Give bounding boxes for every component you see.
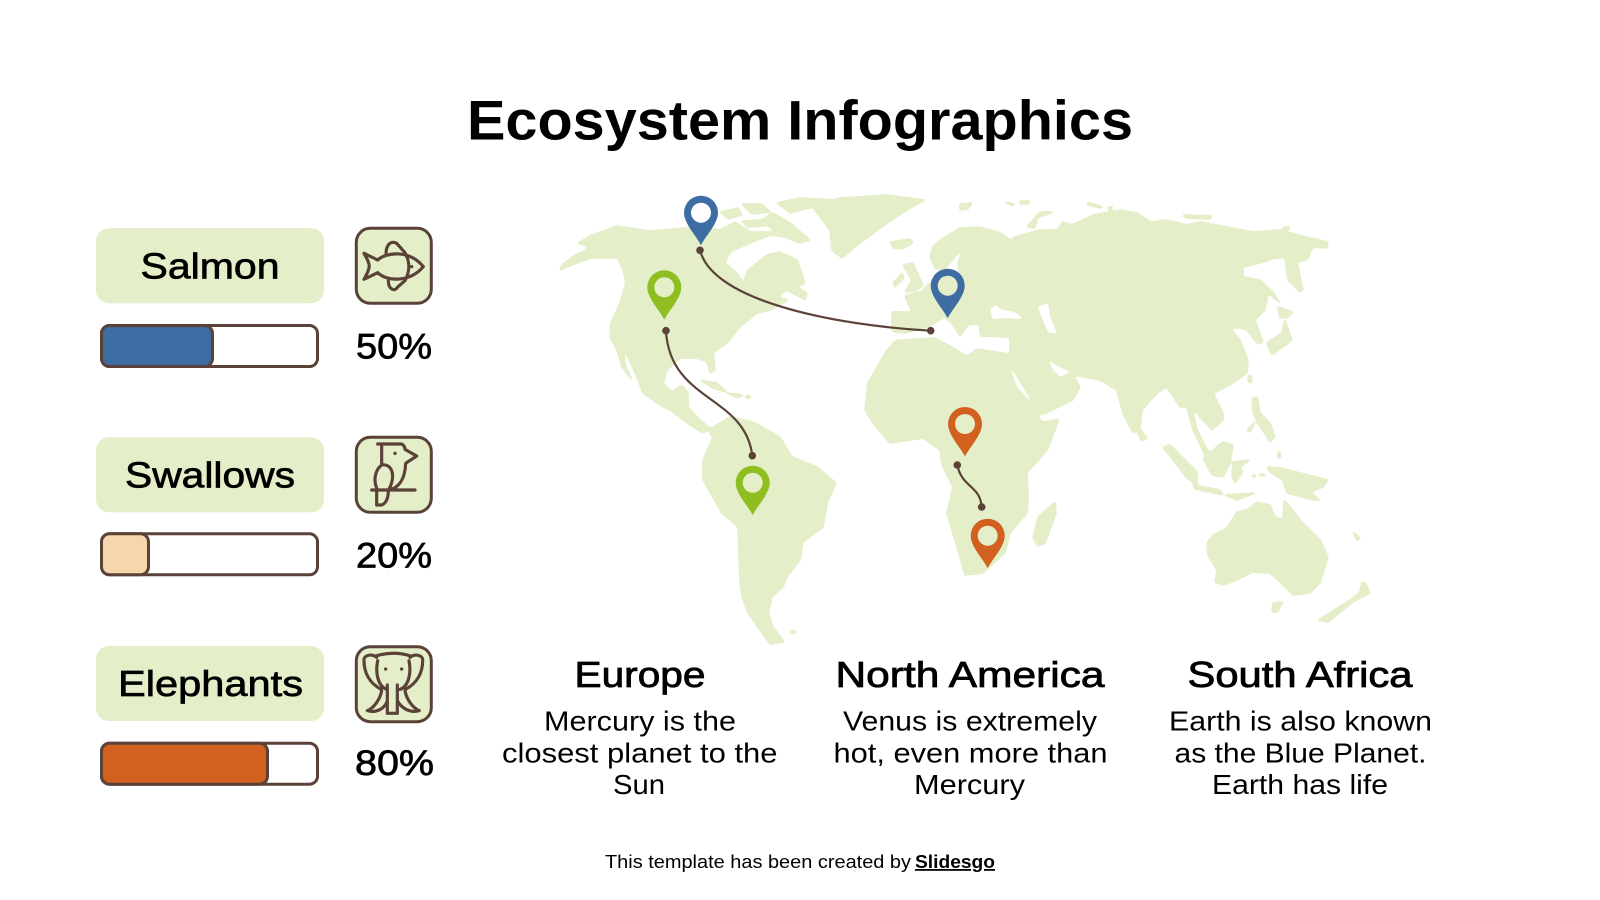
- footer credit: This template has been created by: [605, 852, 911, 872]
- title: Ecosystem Infographics: [467, 88, 1133, 152]
- swallows value: 20%: [356, 536, 432, 576]
- footer credit: Slidesgo: [915, 852, 995, 872]
- north america description: [834, 706, 1108, 800]
- north america description: Venus is extremely: [843, 706, 1097, 737]
- route: orange pins: [954, 461, 986, 511]
- icon: bird: [356, 437, 431, 512]
- pin: blue north america: [684, 196, 718, 245]
- panel: elephants: [96, 646, 434, 784]
- world map: [560, 195, 1370, 644]
- pin: green south america: [736, 466, 770, 515]
- route: blue pins: [696, 246, 934, 335]
- europe heading: Europe: [574, 654, 706, 695]
- pin: green north america: [647, 270, 681, 320]
- south africa description: Earth is also known: [1169, 706, 1432, 737]
- pin: blue europe: [931, 269, 965, 318]
- route: green pins: [662, 327, 756, 460]
- elephants label: [96, 646, 324, 721]
- text block: europe: [502, 654, 778, 800]
- text block: north america: [834, 654, 1108, 800]
- icon: fish: [356, 228, 431, 303]
- europe description: Mercury is the: [544, 706, 736, 737]
- europe description: closest planet to the: [502, 737, 778, 768]
- icon: elephant: [356, 647, 431, 722]
- salmon progress bar 50%: [102, 326, 318, 366]
- swallows progress bar 20%: [102, 534, 318, 575]
- south africa heading: South Africa: [1188, 654, 1414, 695]
- salmon label: Salmon: [140, 246, 280, 286]
- europe description: Sun: [613, 769, 665, 800]
- elephants value: 80%: [355, 744, 434, 783]
- panel: swallows: [96, 437, 432, 576]
- elephants progress bar 80%: [102, 743, 318, 784]
- south africa description: Earth has life: [1212, 769, 1388, 800]
- text block: south africa: [1169, 654, 1432, 800]
- pin: orange central africa: [948, 407, 982, 456]
- elephants label: Elephants: [118, 663, 303, 704]
- swallows label: [96, 437, 324, 512]
- panel: salmon: [96, 228, 432, 366]
- swallows label: Swallows: [125, 454, 295, 496]
- south africa description: [1169, 706, 1432, 800]
- north america description: Mercury: [914, 769, 1025, 800]
- salmon value: 50%: [356, 328, 432, 366]
- pin: orange south africa: [971, 519, 1005, 568]
- south africa description: as the Blue Planet.: [1174, 737, 1426, 768]
- salmon label: [96, 228, 324, 303]
- north america description: hot, even more than: [834, 737, 1108, 768]
- europe description: [502, 706, 778, 800]
- north america heading: North America: [836, 654, 1106, 695]
